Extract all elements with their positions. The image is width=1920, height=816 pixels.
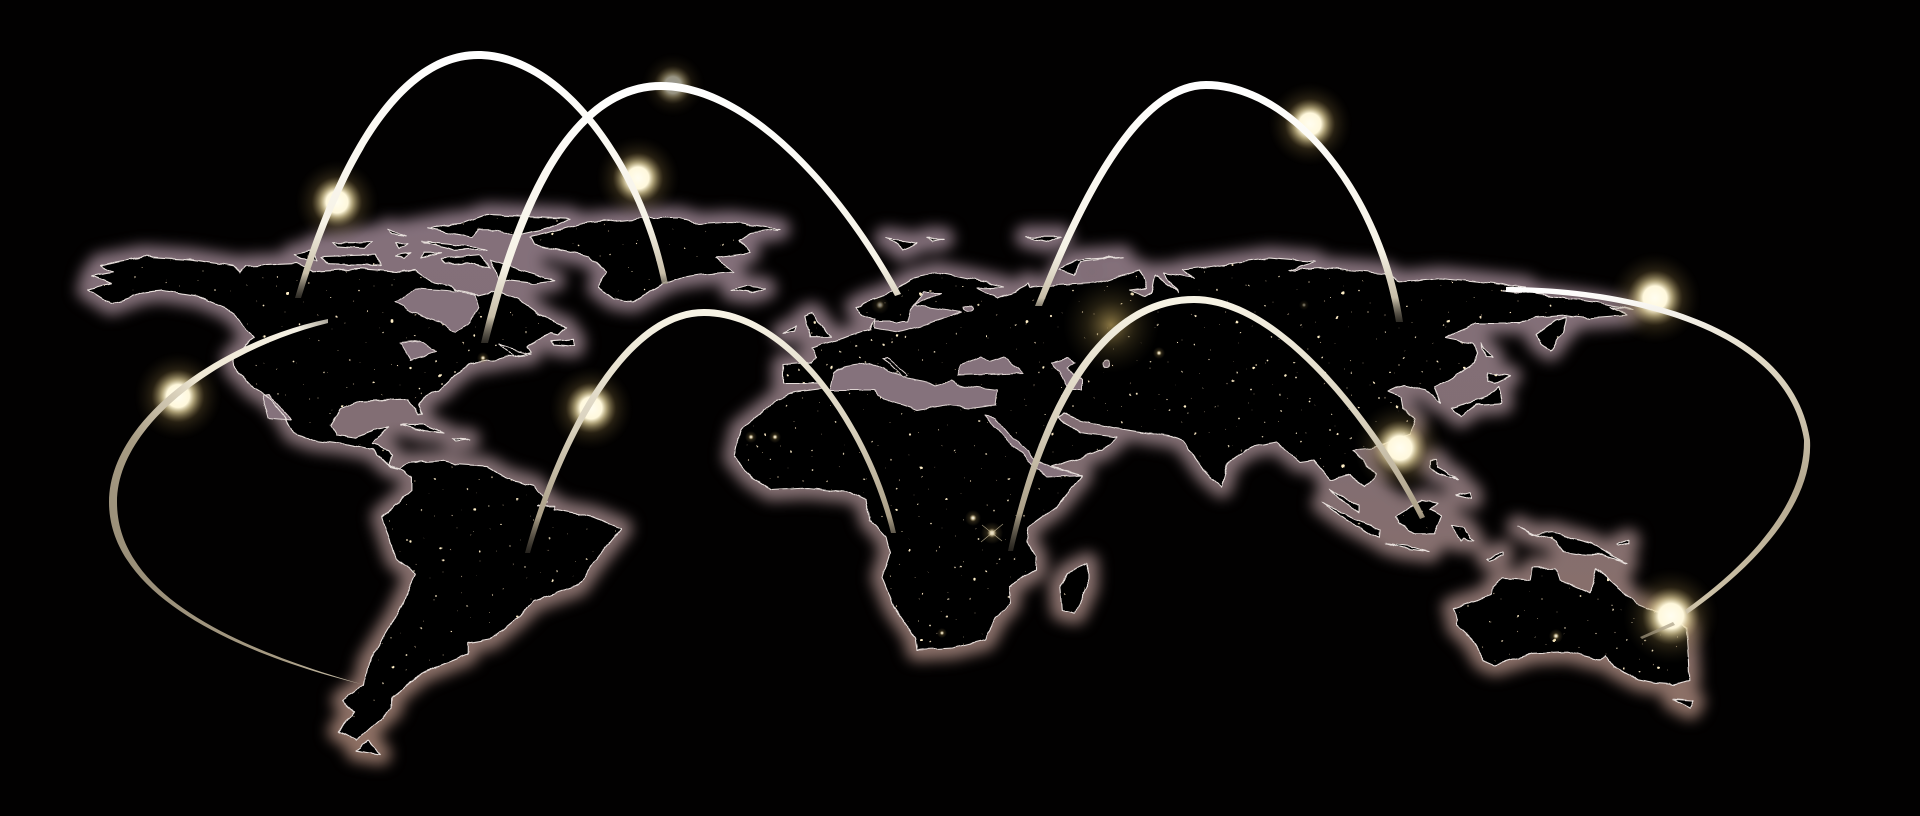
- arc: North America around the Pacific to South America: [109, 319, 361, 684]
- arc: Canada to Greenland: [295, 51, 668, 298]
- sea: Red Sea and Gulf of Aden: [985, 415, 1082, 477]
- node: Atlantic: [549, 366, 633, 450]
- node: Far East Russia: [1609, 252, 1701, 344]
- light cluster: west Africa: [745, 431, 757, 443]
- arc: Far East around the Pacific to Australia: [1506, 287, 1810, 614]
- glowing network nodes: [134, 53, 1719, 664]
- sea: White Sea: [964, 305, 974, 311]
- bright city clusters: [477, 296, 1563, 643]
- light cluster: New York: [477, 352, 489, 364]
- node: Arctic Asia arc: [1268, 82, 1352, 166]
- light cluster: Nigeria: [769, 431, 781, 443]
- sea: Caspian: [1052, 358, 1082, 390]
- city lights: scattered stars over land: [104, 218, 1686, 718]
- coastline outlines: [88, 214, 1694, 754]
- node: north Atlantic, dim: [641, 53, 705, 117]
- sea: Baltic: [874, 292, 961, 332]
- node: Pacific: [134, 352, 222, 440]
- sea: Great Lakes: [400, 341, 436, 360]
- light cluster: Australia: [1549, 629, 1563, 643]
- node: Australia: [1623, 568, 1719, 664]
- arc: east Africa to Indonesia: [1008, 296, 1425, 551]
- node: Greenland arc: [596, 136, 680, 220]
- dark landmasses: [88, 214, 1694, 754]
- connection arcs: [109, 51, 1810, 684]
- sea: Hudson Bay: [396, 289, 479, 333]
- light cluster: Siberia: [1299, 300, 1309, 310]
- light cluster: Southern Africa: [937, 628, 947, 638]
- soft golden haze over Russia: [1063, 277, 1159, 373]
- sea: Mediterranean: [830, 363, 997, 410]
- arc: Russia to east Asia: [1035, 81, 1403, 322]
- light cluster: east Africa sparkle: [981, 522, 1003, 544]
- node: South East Asia: [1354, 402, 1446, 494]
- peninsula: Italy: [884, 358, 908, 378]
- arc tail: fading into Australia: [1640, 622, 1675, 639]
- light cluster: western Europe: [871, 296, 889, 314]
- sea: Black Sea: [957, 357, 1022, 375]
- light cluster: central Africa: [965, 510, 981, 526]
- coastal mauve glow around the continents: [68, 194, 1714, 774]
- sea: Aral: [1104, 360, 1110, 368]
- inland seas: [262, 289, 1110, 477]
- arc: South America to Africa: [525, 309, 896, 553]
- world map: land, city lights, seas and coastlines: [87, 214, 1694, 756]
- light cluster: central Asia: [1153, 347, 1165, 359]
- sea: Gulf of California: [262, 394, 292, 420]
- arc: eastern North America to Scandinavia: [481, 82, 901, 343]
- node: Canada: [295, 160, 379, 244]
